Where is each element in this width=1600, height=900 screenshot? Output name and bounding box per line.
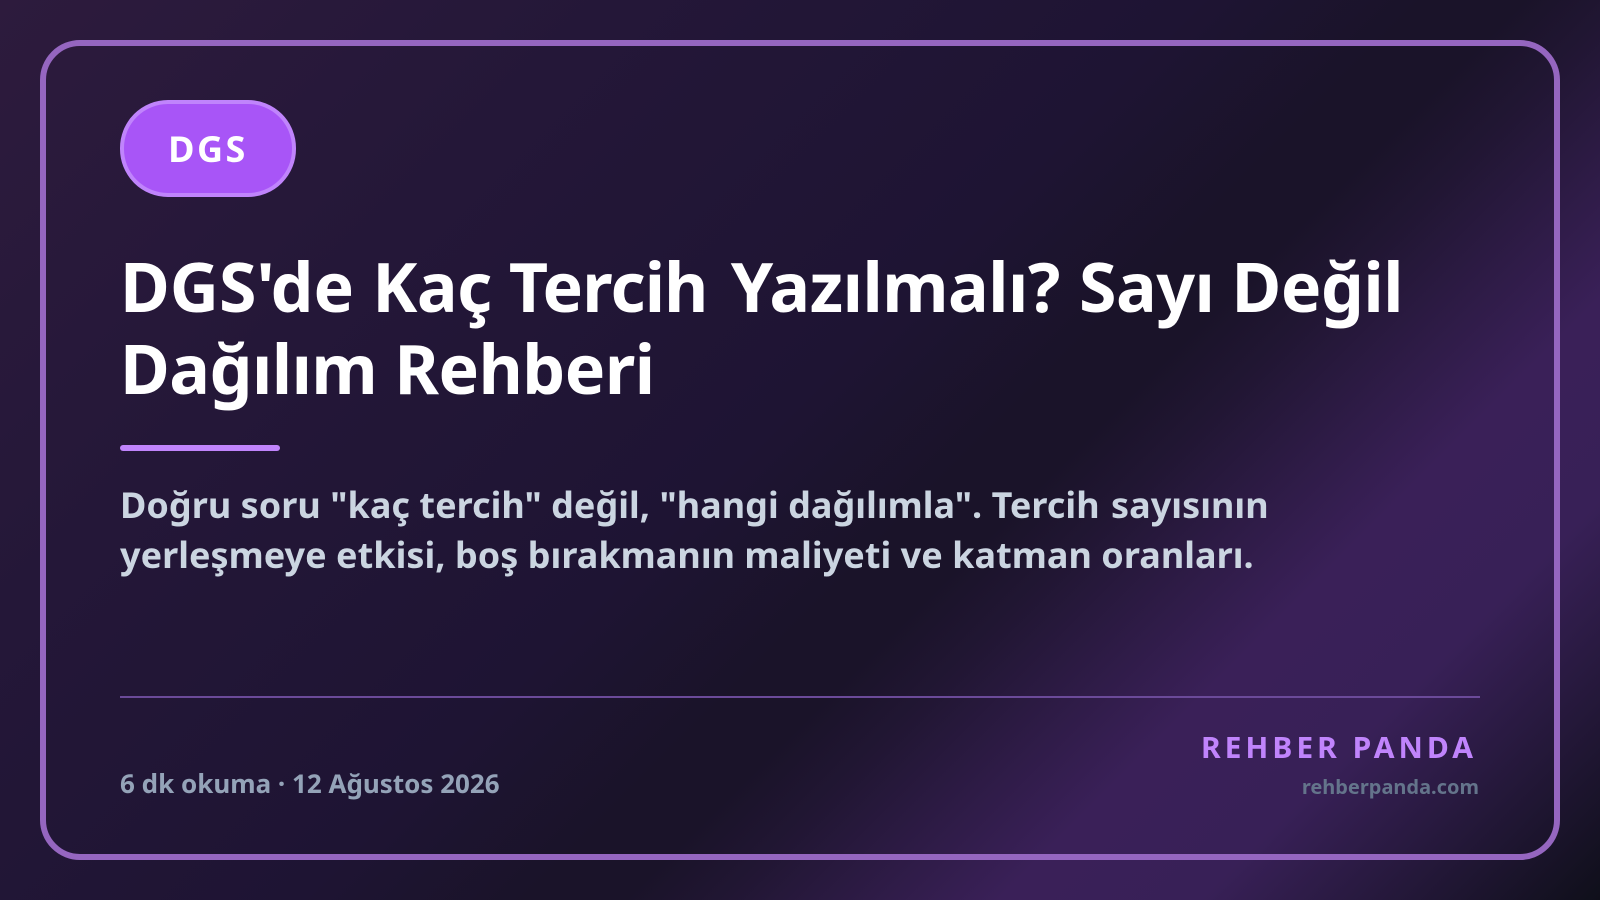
- website url: rehberpanda.com: [1302, 773, 1479, 800]
- subtitle: yerleşmeye etkisi, boş bırakmanın maliyeti ve katman oranları.: [120, 530, 1254, 579]
- reading time and date: 6 dk okuma · 12 Ağustos 2026: [120, 765, 500, 801]
- category badge: DGS: [168, 124, 248, 173]
- title: [120, 239, 1403, 414]
- subtitle: [120, 480, 1269, 579]
- brand name: REHBER PANDA: [1201, 726, 1477, 767]
- title: Dağılım Rehberi: [120, 321, 655, 414]
- title: DGS'de Kaç Tercih Yazılmalı? Sayı Değil: [120, 239, 1403, 332]
- accent bar: [120, 445, 280, 451]
- category badge: [120, 100, 296, 197]
- subtitle: Doğru soru "kaç tercih" değil, "hangi dağılımla". Tercih sayısının: [120, 480, 1269, 529]
- footer divider: [120, 696, 1480, 698]
